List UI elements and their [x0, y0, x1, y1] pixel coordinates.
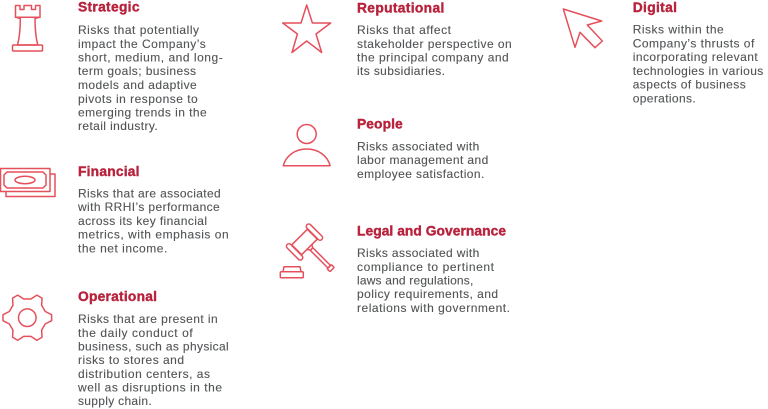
text: operational description: Risks that are present in: [78, 312, 218, 326]
panel: legal and governance: [280, 223, 510, 315]
panel: financial: [0, 164, 229, 256]
panel: operational: [3, 289, 229, 408]
text: reputational description: its subsidiaries.: [357, 64, 445, 78]
text: digital description: aspects of business: [633, 78, 746, 92]
text: reputational description: stakeholder perspective on: [357, 37, 512, 51]
text: strategic description: pivots in response to: [78, 92, 198, 106]
text: strategic description: impact the Company’s: [78, 37, 206, 51]
text: financial description: metrics, with emphasis on: [78, 228, 229, 242]
text: legal and governance description: relations with government.: [357, 301, 510, 315]
panel: strategic: [12, 0, 223, 133]
text: operational description: the daily conduct of: [78, 326, 193, 340]
text: strategic description: [78, 23, 223, 133]
text: operational description: business, such as physical: [78, 339, 229, 353]
icon: gavel: [280, 223, 344, 281]
heading: reputational: Reputational: [357, 1, 444, 16]
panel: reputational: [283, 1, 512, 78]
icon: person: [283, 124, 330, 166]
text: legal and governance description: [357, 246, 510, 315]
icon: star: [283, 5, 331, 52]
text: digital description: Company’s thrusts of: [633, 36, 755, 50]
text: people description: labor management and: [357, 153, 488, 167]
text: digital description: technologies in various: [633, 64, 763, 78]
text: digital description: incorporating relevant: [633, 50, 758, 64]
text: people description: Risks associated with: [357, 139, 479, 153]
text: operational description: distribution centers, as: [78, 367, 210, 381]
heading: operational: Operational: [78, 289, 157, 304]
text: financial description: [77, 186, 229, 256]
text: legal and governance description: Risks associated with: [357, 246, 479, 260]
text: legal and governance description: laws and regulations,: [357, 274, 473, 288]
text: strategic description: retail industry.: [78, 119, 158, 133]
text: operational description: supply chain.: [78, 394, 152, 408]
text: people description: [357, 139, 488, 181]
heading: people: People: [357, 116, 403, 131]
icon: cursor arrow: [563, 9, 602, 48]
icon: chess rook: [12, 6, 42, 51]
text: digital description: operations.: [633, 92, 696, 106]
text: reputational description: the principal company and: [357, 50, 509, 64]
text: financial description: across its key financial: [78, 214, 207, 228]
text: people description: employee satisfaction.: [357, 167, 484, 181]
text: operational description: risks to stores and: [78, 353, 184, 367]
text: strategic description: Risks that potentially: [78, 23, 199, 37]
text: reputational description: [357, 23, 512, 78]
text: legal and governance description: policy requirements, and: [357, 287, 498, 301]
text: financial description: with RRHI’s performance: [77, 200, 220, 214]
text: strategic description: models and adaptive: [78, 78, 197, 92]
text: strategic description: short, medium, and long-: [78, 50, 223, 64]
icon: gear: [3, 295, 52, 340]
text: financial description: Risks that are associated: [78, 186, 221, 200]
icon: banknotes: [0, 168, 55, 196]
heading: digital: Digital: [633, 0, 677, 15]
text: financial description: the net income.: [78, 242, 167, 256]
text: legal and governance description: compliance to pertinent: [357, 260, 495, 274]
text: strategic description: emerging trends in the: [78, 106, 207, 120]
text: operational description: [77, 312, 229, 408]
text: operational description: well as disruptions in the: [77, 380, 222, 394]
panel: digital: [563, 0, 763, 106]
heading: legal and governance: Legal and Governance: [357, 223, 506, 238]
panel: people: [283, 116, 488, 181]
text: strategic description: term goals; business: [78, 64, 196, 78]
text: digital description: Risks within the: [633, 22, 724, 36]
heading: financial: Financial: [78, 164, 140, 179]
text: reputational description: Risks that affect: [357, 23, 452, 37]
text: digital description: [633, 22, 763, 106]
